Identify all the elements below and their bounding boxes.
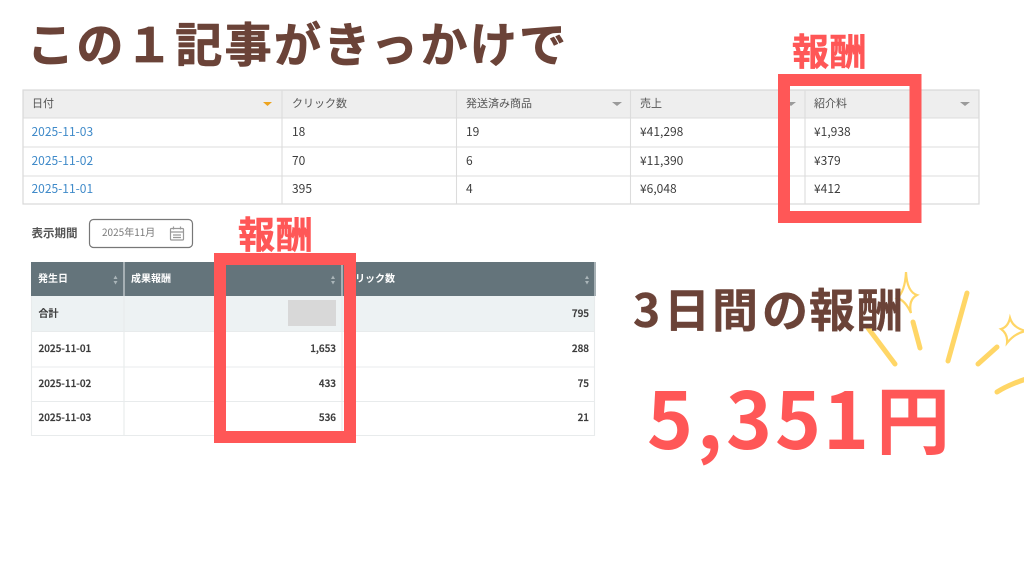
total row with masked value: [38, 300, 589, 326]
table row 2025-11-01: 395: [292, 180, 312, 197]
table header row: [32, 95, 970, 111]
table row 2025-11-01: 2025-11-01: [32, 180, 93, 197]
table header row: クリック数: [292, 95, 347, 111]
total row with masked value: 795: [572, 305, 589, 320]
table header: 発生日: [38, 270, 68, 285]
table row 2025-11-02: 2025-11-02: [32, 152, 93, 169]
total row with masked value: 合計: [38, 305, 58, 320]
table row 2025-11-01: 4: [466, 180, 473, 197]
table row 2025-11-01: [32, 180, 841, 197]
row 2025-11-01: [38, 340, 589, 355]
date picker: [90, 220, 192, 248]
icon: calendar: [170, 226, 184, 240]
table header row: 売上: [640, 95, 662, 111]
date period label: 表示期間: [32, 225, 78, 241]
table row 2025-11-01: ¥412: [814, 180, 841, 197]
table: daily sales and referral fees: [23, 90, 979, 204]
table header row: 紹介料: [814, 95, 847, 111]
row 2025-11-02: 433: [319, 375, 336, 390]
decoration: yellow burst rays and sparkles: [868, 272, 1024, 392]
heading: three day reward: 3日間の報酬: [633, 275, 903, 341]
row 2025-11-02: 75: [578, 375, 589, 390]
table row 2025-11-03: 19: [466, 123, 479, 140]
table header row: 日付: [32, 95, 54, 111]
table row 2025-11-03: 18: [292, 123, 306, 140]
table header row: 発送済み商品: [466, 95, 532, 111]
table row 2025-11-02: ¥379: [814, 152, 841, 169]
row 2025-11-03: 21: [578, 409, 589, 424]
row 2025-11-02: [38, 375, 589, 390]
table header: [31, 262, 596, 296]
row 2025-11-03: 536: [319, 409, 336, 424]
table header: クリック数: [345, 270, 395, 285]
row 2025-11-03: [38, 409, 589, 424]
table row 2025-11-02: [32, 152, 841, 169]
table row 2025-11-02: 70: [292, 152, 306, 169]
icon: sparkle right: [1001, 318, 1024, 343]
row 2025-11-01: 1,653: [310, 340, 336, 355]
table row 2025-11-03: ¥41,298: [640, 123, 684, 140]
big number: total reward: 5,351: [647, 360, 869, 472]
highlight box: referral fee column: [784, 80, 916, 217]
table header: 成果報酬: [131, 270, 171, 285]
row 2025-11-03: 2025-11-03: [38, 409, 92, 424]
row 2025-11-01: 2025-11-01: [38, 340, 92, 355]
table row 2025-11-02: ¥11,390: [640, 152, 684, 169]
title: この１記事がきっかけで: [27, 7, 569, 76]
table row 2025-11-03: 2025-11-03: [32, 123, 93, 140]
table row 2025-11-03: [32, 123, 851, 140]
table row 2025-11-02: 6: [466, 152, 473, 169]
highlight box: reward column: [220, 259, 350, 437]
table: performance rewards: [31, 262, 596, 436]
label: reward above top box: 報酬: [792, 22, 867, 76]
row 2025-11-02: 2025-11-02: [38, 375, 92, 390]
date picker: 2025年11月: [102, 224, 155, 239]
icon: sparkle left: [897, 272, 917, 313]
table row 2025-11-03: ¥1,938: [814, 123, 851, 140]
table row 2025-11-01: ¥6,048: [640, 180, 677, 197]
row 2025-11-01: 288: [572, 340, 589, 355]
label: reward above lower box: 報酬: [238, 205, 314, 259]
big number: total reward: 円: [876, 363, 950, 470]
